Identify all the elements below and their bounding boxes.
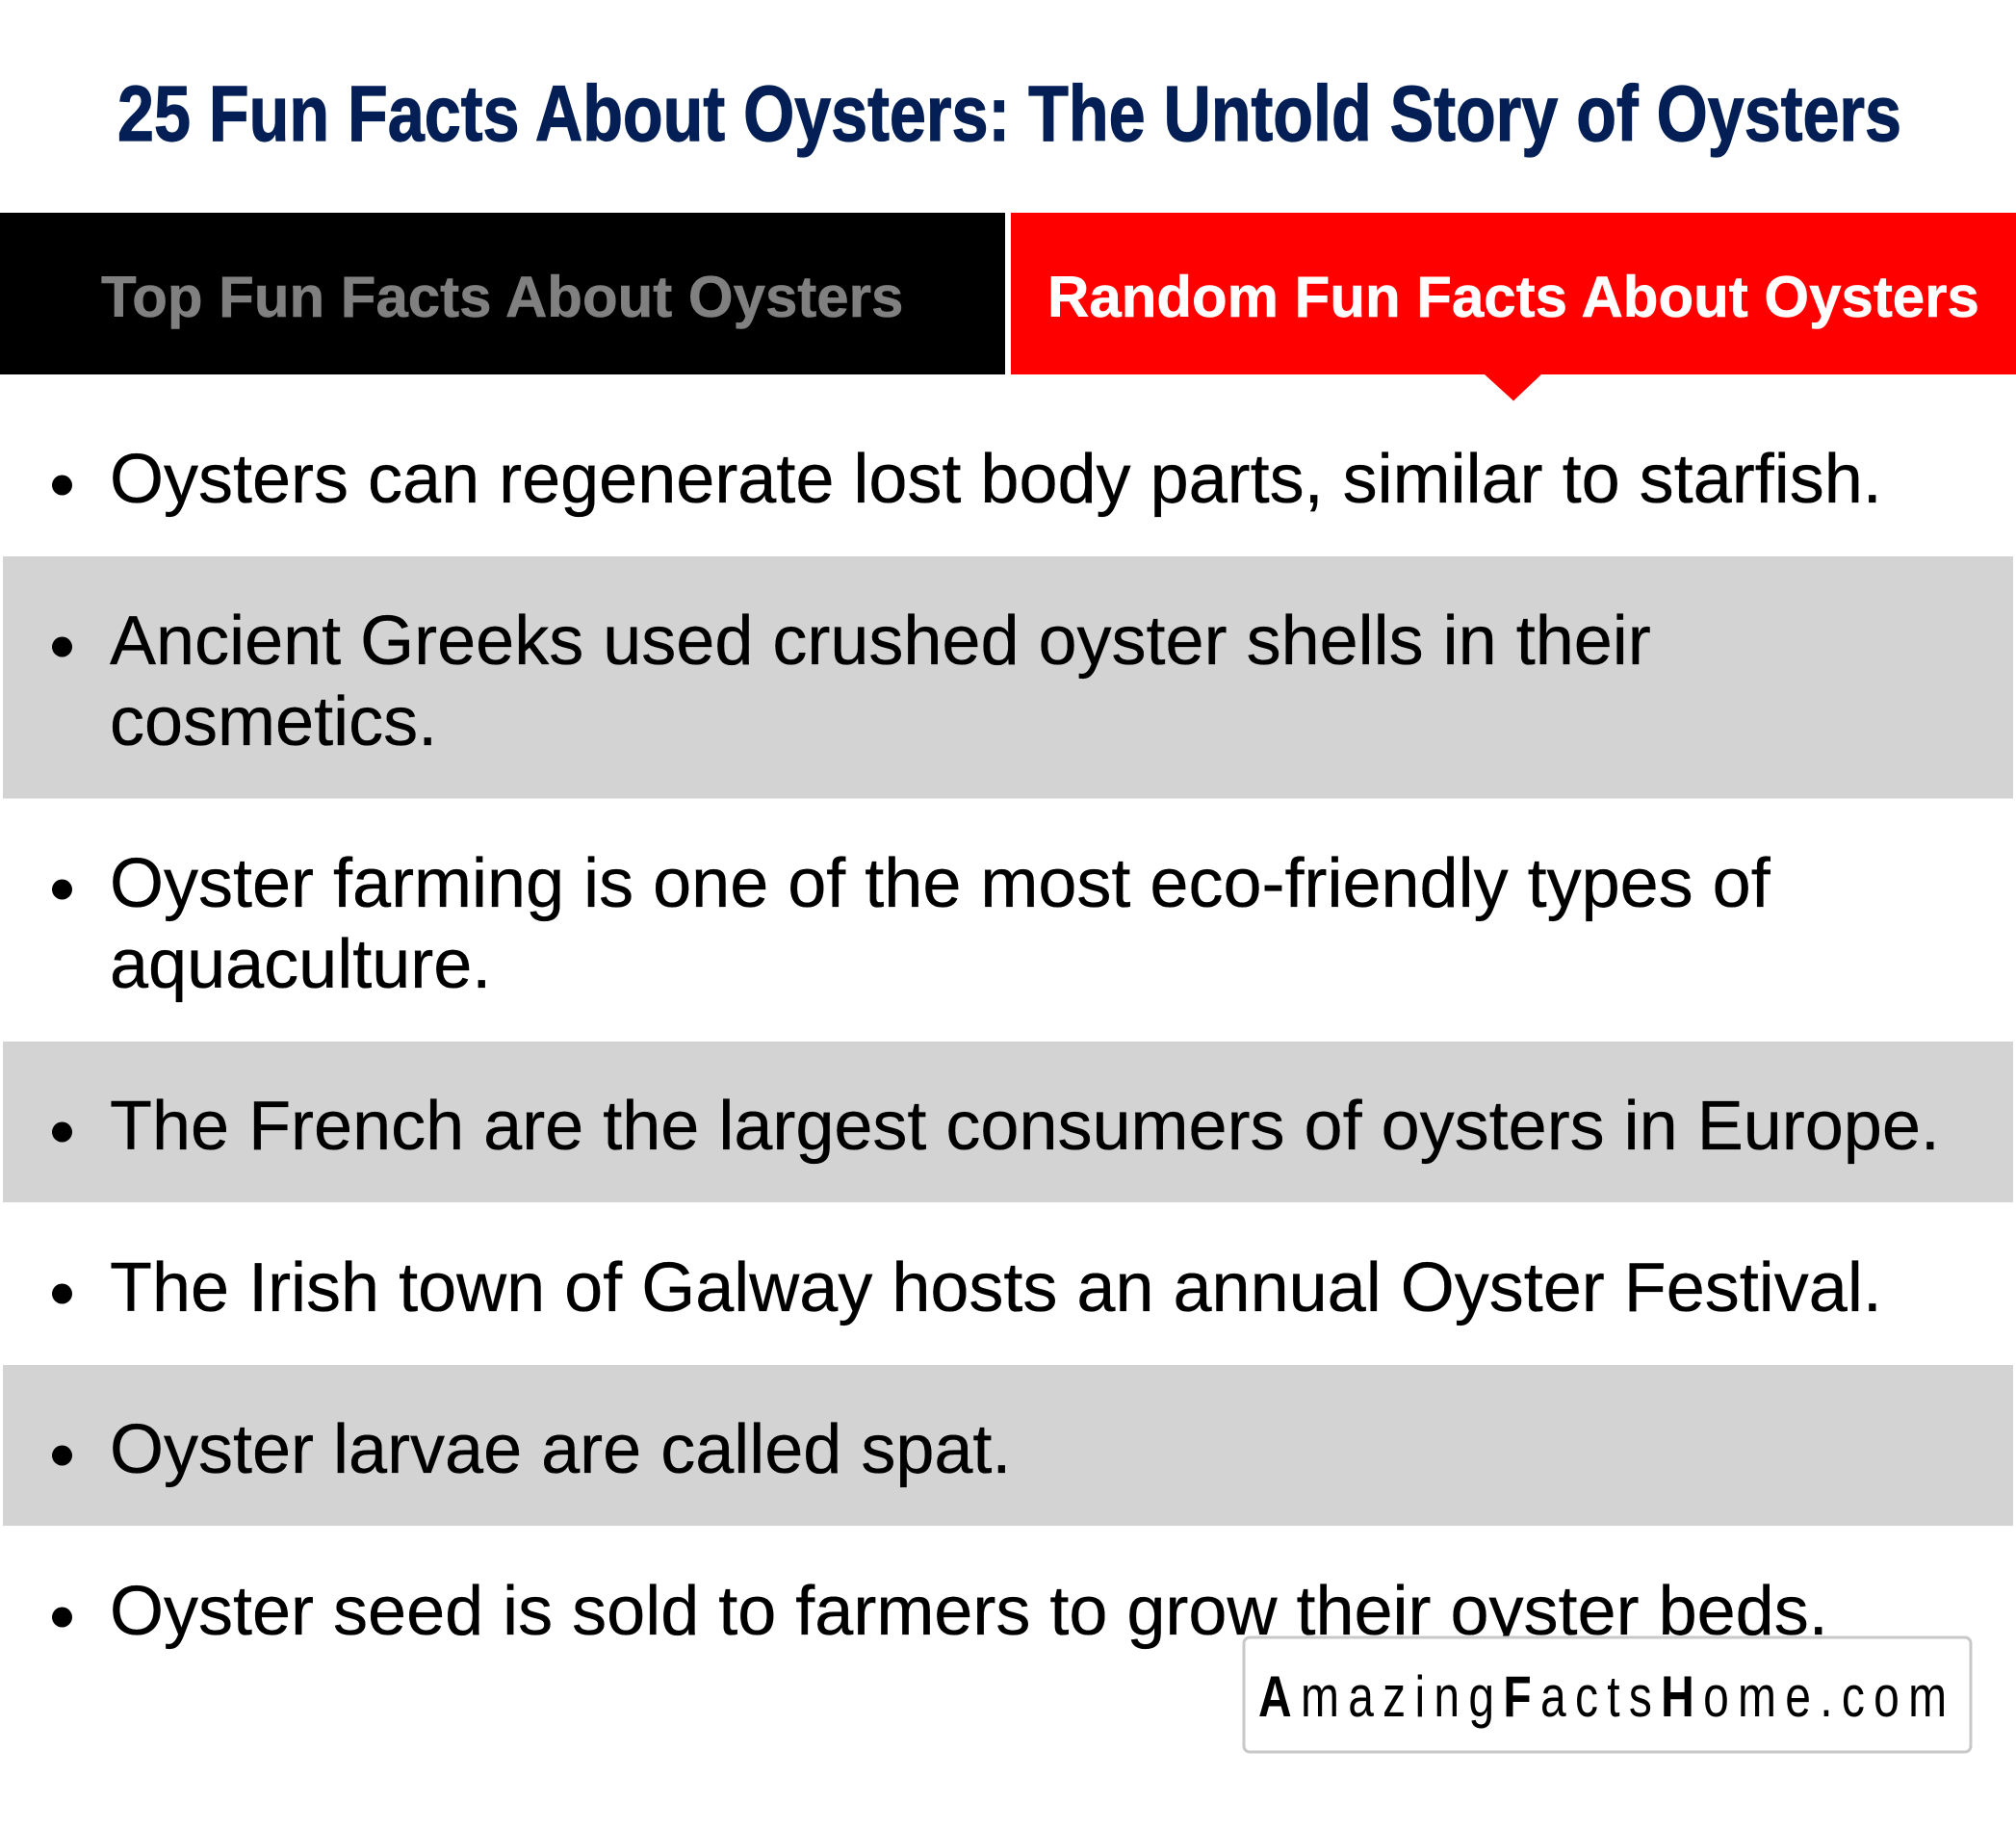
fact row 4	[3, 1042, 2013, 1202]
tab: top fun facts: Top Fun Facts About Oysters	[101, 265, 903, 329]
tab: random fun facts (active): Random Fun Facts About Oysters	[1047, 265, 1979, 329]
fact row 6	[3, 1365, 2013, 1526]
fact row 6: Oyster larvae are called spat.	[110, 1411, 1011, 1488]
watermark: AmazingFactsHome.com	[1258, 1664, 1955, 1729]
fact row 2	[3, 556, 2013, 799]
tab: random fun facts (active)	[1011, 213, 2016, 400]
fact row 3: aquaculture.	[110, 926, 491, 1003]
fact row 3	[52, 845, 1771, 1003]
fact row 2: cosmetics.	[110, 683, 437, 760]
fact row 4: The French are the largest consumers of oysters in Europe.	[110, 1088, 1940, 1165]
tab: top fun facts	[0, 213, 1005, 374]
fact row 1: Oysters can regenerate lost body parts, similar to starfish.	[110, 441, 1882, 518]
fact row 3: Oyster farming is one of the most eco-friendly types of	[110, 845, 1771, 922]
fact row 2: Ancient Greeks used crushed oyster shells in their	[110, 603, 1651, 680]
fact row 5: The Irish town of Galway hosts an annual Oyster Festival.	[110, 1249, 1882, 1326]
fact row 7: Oyster seed is sold to farmers to grow their oyster beds.	[110, 1573, 1828, 1650]
watermark	[1244, 1637, 1971, 1752]
